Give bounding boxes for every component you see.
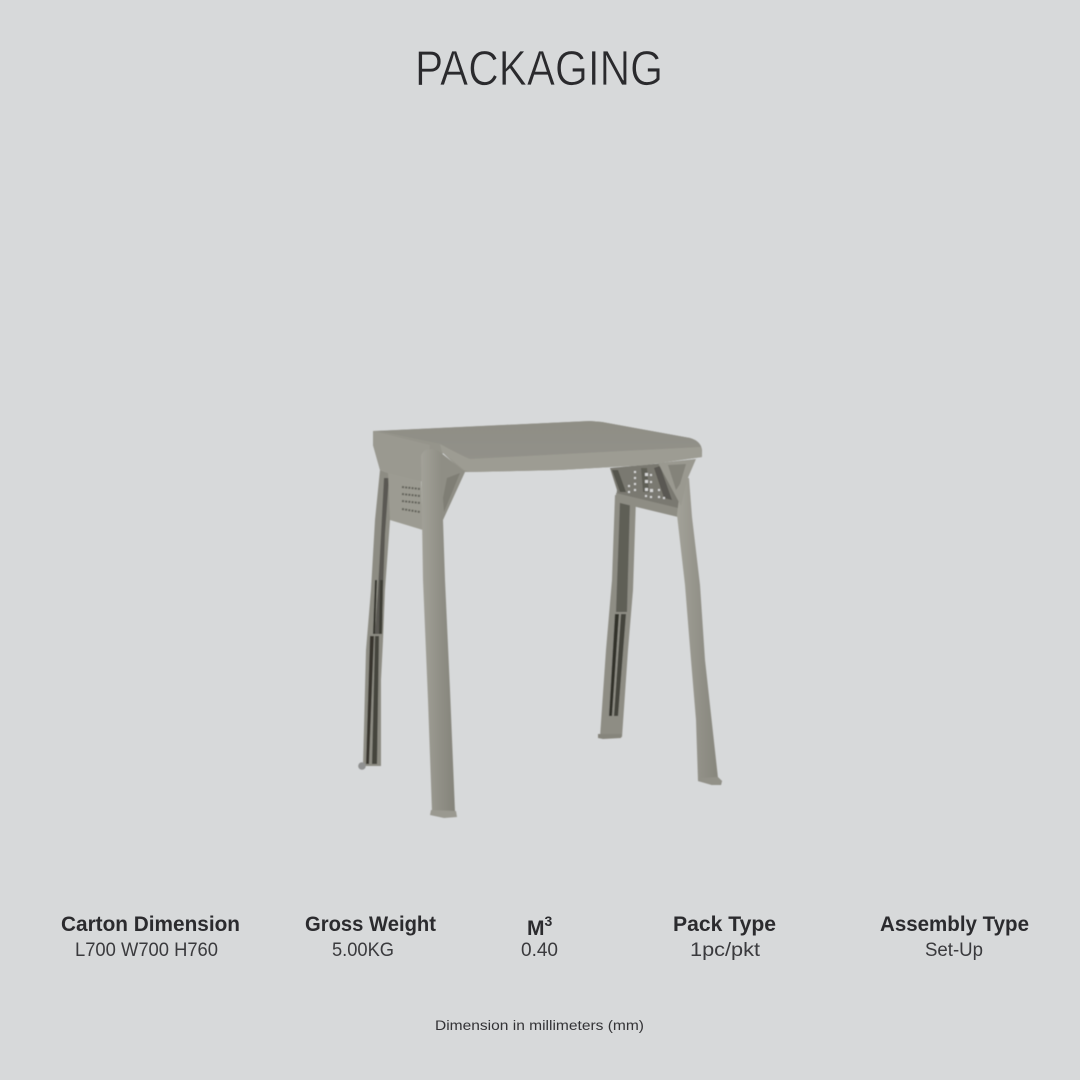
back left leg <box>358 470 391 770</box>
right mesh panel <box>610 463 682 517</box>
left apron <box>373 431 430 482</box>
spec: m3: 0.40 <box>521 940 558 961</box>
spec: assembly type <box>880 913 1029 961</box>
spec: pack type: Pack Type <box>673 913 776 936</box>
back right leg <box>598 495 636 739</box>
title: PACKAGING <box>415 42 663 96</box>
spec: assembly type: Set-Up <box>925 940 983 961</box>
front right leg <box>677 478 722 785</box>
spec: carton dimension: L700 W700 H760 <box>75 940 218 961</box>
spec: carton dimension <box>61 913 240 961</box>
seat top <box>378 421 701 459</box>
spec: carton dimension: Carton Dimension <box>61 913 240 936</box>
left gusset <box>438 452 465 520</box>
spec: pack type <box>673 913 776 961</box>
spec: m3: 3 <box>544 913 552 929</box>
spec: gross weight: 5.00KG <box>332 940 394 961</box>
spec: m3 <box>521 913 558 961</box>
right gusset <box>658 459 696 506</box>
spec: assembly type: Assembly Type <box>880 913 1029 936</box>
product image: stool <box>358 421 722 818</box>
spec: gross weight: Gross Weight <box>305 913 436 936</box>
seat front edge <box>440 444 702 472</box>
spec: m3: M <box>527 917 544 940</box>
left side panel with perforation <box>388 472 423 530</box>
spec: pack type: 1pc/pkt <box>690 940 761 961</box>
footnote: Dimension in millimeters (mm) <box>435 1018 644 1033</box>
seat silhouette <box>373 421 702 478</box>
front left leg <box>421 449 457 818</box>
spec: gross weight <box>305 913 436 961</box>
